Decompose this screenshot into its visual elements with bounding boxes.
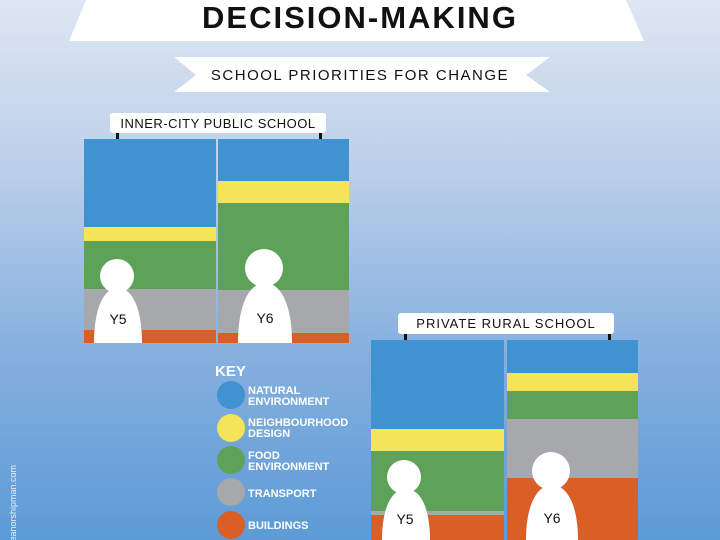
bar: Y6 inner-city xyxy=(218,139,349,343)
key: buildings xyxy=(217,511,308,539)
figure: Y5 rural xyxy=(382,460,430,540)
label: private rural school: PRIVATE RURAL SCHOOL xyxy=(416,316,596,331)
figure: Y6 rural xyxy=(526,452,578,540)
key: food environment xyxy=(217,446,330,474)
figure: Y6 rural: Y6 xyxy=(543,510,561,526)
key: buildings: BUILDINGS xyxy=(248,520,308,532)
subtitle ribbon xyxy=(174,57,550,92)
subtitle ribbon: SCHOOL PRIORITIES FOR CHANGE xyxy=(211,67,509,84)
key: transport xyxy=(217,478,317,506)
title banner: DECISION-MAKING xyxy=(202,0,518,35)
label: inner-city public school: INNER-CITY PUBLIC SCHOOL xyxy=(120,116,316,131)
key: food environment: FOOD xyxy=(248,450,280,462)
figure: Y5: Y5 xyxy=(109,311,127,327)
label: private rural school xyxy=(398,313,614,340)
label: inner-city public school xyxy=(110,113,326,139)
key: neighbourhood design xyxy=(217,414,348,442)
bar: Y6 rural xyxy=(507,340,638,540)
key: transport: TRANSPORT xyxy=(248,488,317,500)
key: neighbourhood design: DESIGN xyxy=(248,428,290,440)
panel: private rural school xyxy=(371,313,638,540)
title banner xyxy=(69,0,644,41)
bar: Y5 rural xyxy=(371,340,504,540)
figure: Y6 xyxy=(238,249,292,343)
figure: Y5 xyxy=(94,259,142,343)
key xyxy=(215,363,348,539)
key: food environment: ENVIRONMENT xyxy=(248,461,330,473)
key: KEY xyxy=(215,363,246,380)
key: natural environment: NATURAL xyxy=(248,385,301,397)
key: natural environment: ENVIRONMENT xyxy=(248,396,330,408)
panel: inner-city public school xyxy=(84,113,349,343)
figure: Y6: Y6 xyxy=(256,310,274,326)
bar: Y5 inner-city xyxy=(84,139,216,343)
key: neighbourhood design: NEIGHBOURHOOD xyxy=(248,417,348,429)
figure: Y5 rural: Y5 xyxy=(396,511,414,527)
key: natural environment xyxy=(217,381,330,409)
